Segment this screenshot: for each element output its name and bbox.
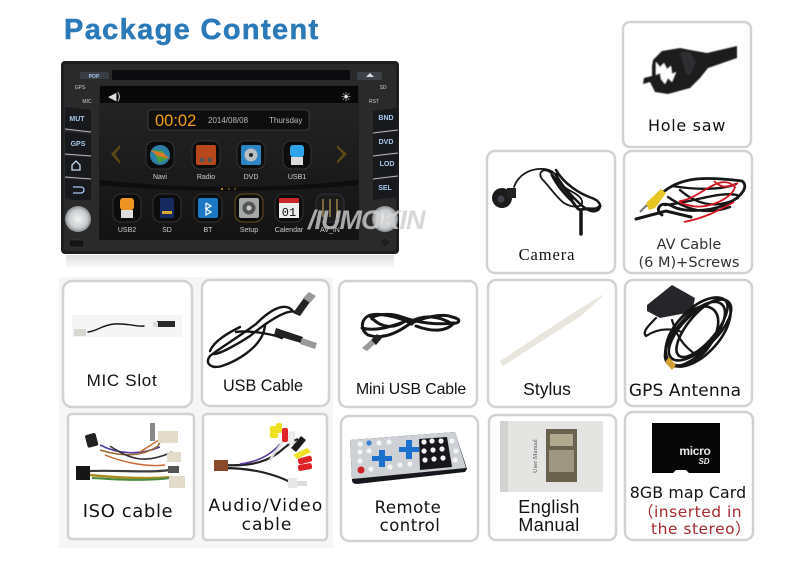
card: MIC slot: MIC Slot (87, 371, 157, 390)
card: camera (487, 151, 615, 273)
microSD photo (652, 423, 720, 473)
clock bar (148, 110, 309, 130)
card: English manual (489, 415, 616, 540)
app icons row 2: Setup (240, 227, 258, 234)
stylus photo (500, 295, 603, 366)
side buttons: GPS (71, 141, 86, 148)
card: English manual: Manual (518, 515, 580, 535)
stereo head unit: RST (369, 99, 379, 105)
app icons row 1: Radio (197, 174, 215, 181)
card: GPS antenna: GPS Antenna (629, 381, 741, 401)
knobs (65, 206, 91, 232)
microSD photo: SD (698, 457, 710, 466)
card: mini USB cable: Mini USB Cable (356, 381, 466, 398)
GPS antenna photo (645, 285, 742, 378)
USB cable photo (208, 292, 317, 367)
card: mini USB cable (339, 281, 477, 407)
side buttons: DVD (379, 139, 393, 146)
card: MIC slot (63, 281, 192, 407)
card: AV cable: (6 M)+Screws (639, 255, 739, 271)
card: 8GB map card: （inserted in (638, 503, 742, 521)
card: remote control: Remote (375, 498, 441, 517)
card: 8GB map card: the stereo） (651, 520, 751, 538)
side buttons (65, 107, 398, 200)
remote photo (350, 432, 467, 484)
card: remote control: control (380, 516, 440, 535)
stereo head unit: POP (89, 74, 100, 80)
app icons row 1: USB1 (288, 174, 306, 181)
app icons row 2: BT (204, 227, 213, 234)
card: stylus: Stylus (523, 379, 571, 399)
card: ISO cable: ISO cable (83, 501, 173, 522)
stereo head unit: SD (380, 85, 387, 91)
stereo head unit: GPS (75, 85, 86, 91)
app icons row 2: SD (162, 227, 172, 234)
card: USB cable (202, 280, 329, 406)
app icons row 2: AV_IN (320, 227, 340, 234)
card: audio/video cable: cable (242, 515, 292, 535)
card: AV cable: AV Cable (657, 237, 721, 253)
stereo head unit: ☀ (341, 90, 351, 104)
app icons row 1: DVD (244, 174, 258, 181)
stereo head unit: 2014/08/08 (208, 116, 249, 125)
AV harness photo (214, 423, 313, 488)
card: remote control (341, 416, 478, 541)
app icons row 2: 01 (282, 206, 296, 220)
microSD photo: micro (679, 444, 711, 458)
side buttons: SEL (378, 185, 393, 192)
mini USB cable photo (362, 314, 459, 351)
stereo head unit (61, 61, 426, 269)
stereo head unit: ◀) (108, 90, 121, 103)
card: camera: Camera (519, 245, 575, 264)
app icons row 1: Navi (153, 174, 167, 181)
MIC cable photo (72, 315, 182, 337)
app icons row 2 (113, 194, 344, 234)
manual photo: User Manual (532, 439, 539, 473)
card: 8GB map card (625, 412, 753, 540)
watermark: /IUMOKIN (307, 205, 426, 235)
side buttons: LOD (380, 161, 394, 168)
card: hole saw: Hole saw (648, 116, 726, 135)
AV cable photo (636, 178, 745, 222)
app icons row 2: USB2 (118, 227, 136, 234)
side buttons: BND (378, 115, 394, 122)
card: stylus (488, 280, 616, 407)
hole saw photo (643, 46, 737, 94)
app icons row 1 (146, 141, 311, 181)
screen (99, 85, 359, 240)
stereo head unit: 00:02 (155, 112, 196, 130)
ISO harness photo (76, 423, 185, 488)
side buttons: MUT (69, 116, 85, 123)
card: AV cable (624, 151, 752, 273)
card: USB cable: USB Cable (223, 377, 303, 395)
card: 8GB map card: 8GB map Card (630, 483, 746, 502)
camera photo (492, 169, 600, 234)
stereo head unit: Thursday (269, 116, 302, 125)
card: audio/video cable: Audio/Video (209, 496, 323, 516)
card: GPS antenna (625, 280, 752, 406)
card: English manual: English (518, 497, 580, 517)
light panel behind cable cards (59, 277, 333, 548)
stereo head unit: MIC (82, 99, 92, 105)
app icons row 2: Calendar (275, 227, 304, 234)
card: audio/video cable (203, 414, 327, 540)
card: ISO cable (68, 414, 194, 539)
card: hole saw (623, 22, 751, 147)
title: Package Content (64, 14, 320, 46)
